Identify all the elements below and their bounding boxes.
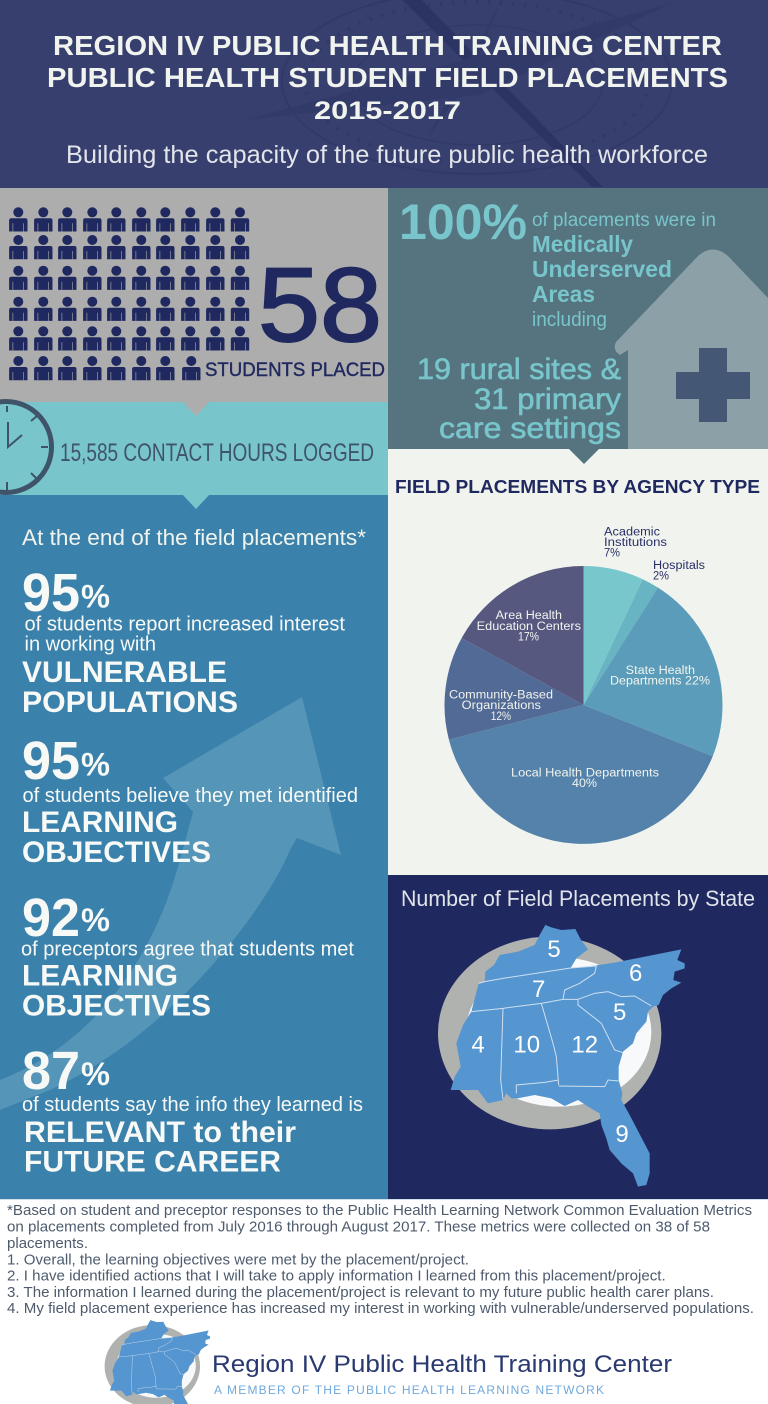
stat: 95 percent vulnerable populations: 95 xyxy=(22,563,80,623)
rural and primary care text xyxy=(417,353,621,445)
title: REGION IV PUBLIC HEALTH TRAINING CENTER xyxy=(53,30,722,61)
rural and primary care text: care settings xyxy=(439,412,621,445)
stat: 92 percent preceptors: of preceptors agree that students met xyxy=(21,938,354,960)
stat: 87 percent relevant: RELEVANT to their xyxy=(24,1116,297,1149)
header banner xyxy=(0,0,768,188)
rural and primary care text: 19 rural sites & xyxy=(417,353,621,386)
logo xyxy=(105,1320,672,1404)
pie labels: 40% xyxy=(572,778,597,790)
compass background xyxy=(245,0,672,187)
underserved text block: Medically xyxy=(532,231,633,257)
pie labels xyxy=(449,526,710,790)
icon: clock xyxy=(0,402,52,492)
map of southeastern states xyxy=(438,925,685,1187)
state counts: 10 xyxy=(513,1032,540,1059)
stat: 92 percent preceptors: 92 xyxy=(22,888,80,948)
underserved text block: Underserved xyxy=(532,256,672,282)
stat: 95 percent vulnerable populations: of students report increased interest xyxy=(24,614,345,636)
stat: 95 percent learning objectives xyxy=(22,731,358,869)
state counts: 7 xyxy=(532,976,545,1003)
state counts: 5 xyxy=(613,999,626,1026)
state counts: 6 xyxy=(629,960,642,987)
stat: 95 percent learning objectives: % xyxy=(81,746,110,782)
underserved text block: Areas xyxy=(532,281,595,307)
panel: contact hours xyxy=(0,401,388,495)
title: 2015-2017 xyxy=(314,97,461,125)
100 percent stat: 100% xyxy=(399,194,527,250)
stat: 87 percent relevant: of students say the info they learned is xyxy=(22,1094,363,1116)
pie labels: Institutions xyxy=(604,537,667,549)
panel: medically underserved areas xyxy=(388,188,768,449)
footnote: 3. The information I learned during the placement/project is relevant to my future public health carer plans. xyxy=(7,1285,714,1301)
stat: 92 percent preceptors xyxy=(21,888,354,1022)
panel: placements by state xyxy=(388,875,768,1199)
footnote xyxy=(7,1203,754,1317)
footnote: 4. My field placement experience has increased my interest in working with vulnerable/underserved populations. xyxy=(7,1301,754,1317)
stat: 95 percent learning objectives: of students believe they met identified xyxy=(22,785,358,807)
state counts: 9 xyxy=(615,1121,629,1148)
stat: 95 percent learning objectives: 95 xyxy=(22,731,80,791)
pie labels: Area Health xyxy=(496,610,562,622)
state counts xyxy=(471,936,642,1148)
pie labels: 12% xyxy=(491,711,511,723)
pie chart xyxy=(445,566,722,844)
stat: 95 percent learning objectives: OBJECTIVES xyxy=(22,836,211,869)
underserved text block: including xyxy=(532,309,607,331)
heading: by state: Number of Field Placements by State xyxy=(401,886,755,911)
footnote: on placements completed from July 2016 through August 2017. These metrics were collected on 38 of 58 xyxy=(7,1220,710,1236)
icon: house with cross xyxy=(615,250,768,449)
intro text: At the end of the field placements* xyxy=(22,525,366,550)
pie labels: Organizations xyxy=(462,700,541,712)
footnote: placements. xyxy=(7,1236,88,1252)
pie labels: Academic xyxy=(604,526,660,538)
pie labels: Local Health Departments xyxy=(511,768,659,780)
students placed label: STUDENTS PLACED xyxy=(205,360,385,381)
stat: 87 percent relevant: % xyxy=(81,1056,110,1092)
pie labels: 17% xyxy=(518,632,539,644)
underserved text block: of placements were in xyxy=(532,210,716,231)
stat: 87 percent relevant xyxy=(22,1041,363,1178)
stat: 87 percent relevant: FUTURE CAREER xyxy=(24,1146,281,1178)
panel: stats after field placements xyxy=(0,494,388,1199)
title xyxy=(47,30,728,125)
title: PUBLIC HEALTH STUDENT FIELD PLACEMENTS xyxy=(47,62,728,93)
pie labels: Community-Based xyxy=(449,690,553,702)
stat: 95 percent vulnerable populations: in working with xyxy=(24,634,156,656)
stat: 92 percent preceptors: OBJECTIVES xyxy=(22,990,211,1022)
underserved text block xyxy=(532,210,716,331)
stat: 92 percent preceptors: LEARNING xyxy=(22,960,178,992)
rural and primary care text: 31 primary xyxy=(474,383,621,416)
stat: 95 percent learning objectives: LEARNING xyxy=(22,806,178,839)
pie labels: Education Centers xyxy=(477,621,581,633)
pie labels: Departments 22% xyxy=(610,676,710,688)
heading: agency type: FIELD PLACEMENTS BY AGENCY TYPE xyxy=(395,476,760,497)
subtitle: Building the capacity of the future public health workforce xyxy=(66,141,708,169)
pie labels: State Health xyxy=(626,665,695,677)
logo tagline: A MEMBER OF THE PUBLIC HEALTH LEARNING NETWORK xyxy=(214,1383,604,1397)
logo name: Region IV Public Health Training Center xyxy=(212,1351,672,1378)
pie labels: 2% xyxy=(653,570,669,582)
pie labels: Hospitals xyxy=(653,560,705,572)
stat: 92 percent preceptors: % xyxy=(81,902,110,938)
panel: students placed xyxy=(0,188,388,402)
logo map xyxy=(105,1320,210,1404)
footnote: 2. I have identified actions that I will take to apply information I learned from this placement/project. xyxy=(7,1269,666,1285)
footnote: 1. Overall, the learning objectives were met by the placement/project. xyxy=(7,1252,469,1268)
state counts: 4 xyxy=(471,1032,485,1059)
pie labels: 7% xyxy=(604,548,620,560)
state counts: 5 xyxy=(547,936,561,963)
stat: 95 percent vulnerable populations: VULNERABLE xyxy=(22,656,227,689)
state counts: 12 xyxy=(571,1032,598,1059)
contact hours label: 15,585 CONTACT HOURS LOGGED xyxy=(60,439,374,467)
icon grid: 58 students xyxy=(9,207,249,380)
big number 58: 58 xyxy=(258,247,382,364)
footnote: *Based on student and preceptor responses to the Public Health Learning Network Common Evaluation Metrics xyxy=(7,1203,752,1219)
arrow background xyxy=(0,697,341,1110)
stat: 95 percent vulnerable populations xyxy=(22,563,345,719)
panel: field placements by agency type xyxy=(388,448,768,875)
stat: 87 percent relevant: 87 xyxy=(22,1041,80,1101)
stat: 95 percent vulnerable populations: % xyxy=(81,578,110,614)
stat: 95 percent vulnerable populations: POPULATIONS xyxy=(22,686,238,719)
